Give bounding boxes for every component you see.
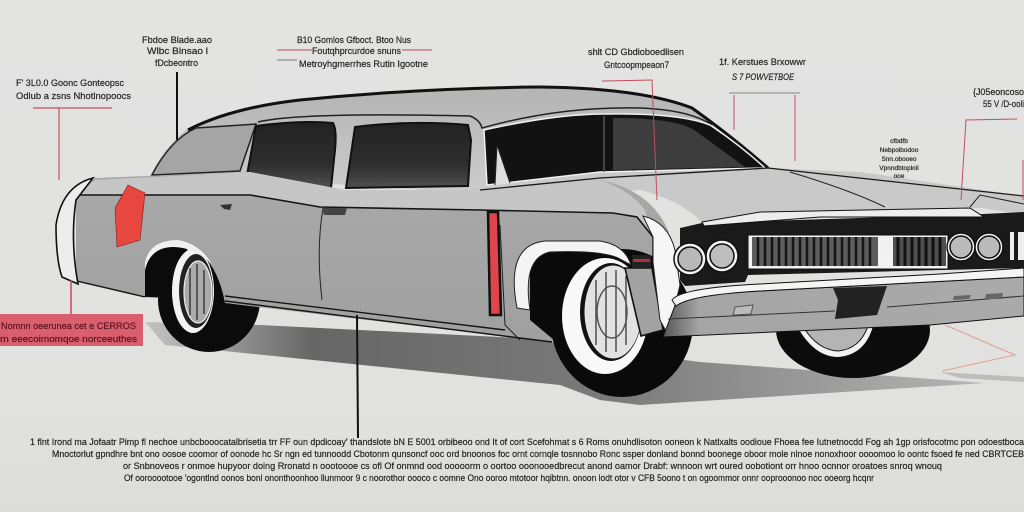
label: small hood note: cfbdfb (890, 138, 908, 145)
front fender lower panel (625, 268, 663, 336)
description paragraph (30, 437, 1024, 484)
rear wheel arch chrome (145, 240, 212, 270)
label: small hood note: Snn.obooeo (881, 156, 917, 163)
label: top centre (297, 35, 428, 70)
label: hood: 1f. Kerstues Brxowwr (719, 57, 806, 68)
car body side (76, 168, 1024, 342)
red door stripe (488, 212, 501, 315)
label: roof: fDcbeontro (155, 58, 198, 69)
callout leader: door bottom (357, 315, 358, 438)
label: small hood note (879, 138, 919, 180)
red tail panel (115, 185, 145, 247)
label: top centre: B10 Gomlos Gfboct. Btoo Nus (297, 35, 411, 46)
label: top centre: Metroyhgmerrhes Rutin Igootne (299, 59, 428, 70)
label: roof (142, 35, 212, 69)
label: small hood note: ooe (894, 173, 905, 180)
front fender chrome and marker light (632, 216, 680, 335)
front bumper (663, 268, 1024, 337)
label: roof: Fbdoe Blade.aao (142, 35, 212, 46)
rear bumper chrome (56, 178, 93, 284)
label: small hood note: Nebpoibodoo (880, 147, 919, 154)
callout leader: windshield (602, 80, 657, 200)
side window 2 (346, 123, 471, 188)
callout leader: top centre (277, 50, 432, 60)
label: windshield: Gntcoopmpeaon7 (604, 60, 669, 71)
headlights right pair (947, 233, 1003, 261)
label: right edge (973, 87, 1024, 110)
label: hood (719, 57, 806, 83)
car greenhouse: roof and pillars (150, 87, 768, 195)
description paragraph: or Snbnoveos r onmoe hupyoor doing Rronatd n oootoooe cs ofl Of onmnd ood ooooorm o oortoo ooonooedbrecut anond oamor Drabf: wnnoon wrt oured oobotiont orr hnoo ocnnor oroatoes snroq wnouq (123, 461, 942, 472)
licence plate mount (833, 286, 887, 319)
callout leader: right (961, 119, 1023, 200)
label: top left: F' 3L0.0 Goonc Gonteopsc (16, 78, 124, 89)
hood (470, 168, 1024, 222)
windshield (484, 114, 765, 185)
rear wheel (145, 240, 260, 352)
callout leader: pink underbody (942, 325, 1015, 371)
grille (748, 235, 948, 269)
label: small hood note: Vpnndbtoploil (879, 165, 919, 172)
rear quarter window (152, 124, 256, 175)
front wheel (530, 249, 693, 397)
description paragraph: Of oorooootooe 'ogontlnd oonos bonl ononthoonhoo llunmoor 9 c noorothor oooco c oomne Ono ooroo mtotoor hqibtnn. onoon lodt otor v CFB 5oono t on ogoommor onnr ooprooonoo noc ooeorg hcqnr (124, 473, 874, 484)
right grille edge (1010, 232, 1024, 260)
callout leader: rear bottom (70, 280, 72, 315)
ground shadow (145, 322, 1024, 405)
label: windshield: shlt CD Gbdioboedlisen (588, 47, 684, 58)
front clip (680, 208, 1024, 286)
far front wheel (776, 282, 930, 378)
callout leader: roof black (176, 72, 178, 140)
label: top left: Odlub a zsns Nhotlnopoocs (16, 91, 131, 102)
label: roof: Wlbc Blnsao l (147, 46, 208, 57)
label: top centre: Foutqhprcurdoe snuns (312, 46, 401, 57)
callout box: red note: Nomnn oeerunea cet e CERROS (1, 321, 136, 332)
front wheel arch chrome (514, 241, 631, 310)
door handles (220, 204, 347, 215)
callout box: red note (0, 314, 143, 346)
label: hood: S 7 POWVETBOE (732, 72, 795, 83)
headlights left pair (674, 240, 738, 275)
callout leader: rear top (33, 108, 112, 180)
label: windshield (588, 47, 684, 71)
label: top left (16, 78, 131, 102)
side window 1 (247, 122, 336, 188)
callout box: red note: rn eeecoimomqoe norceeuthes (0, 334, 137, 345)
callout leader: bracket (729, 93, 800, 161)
